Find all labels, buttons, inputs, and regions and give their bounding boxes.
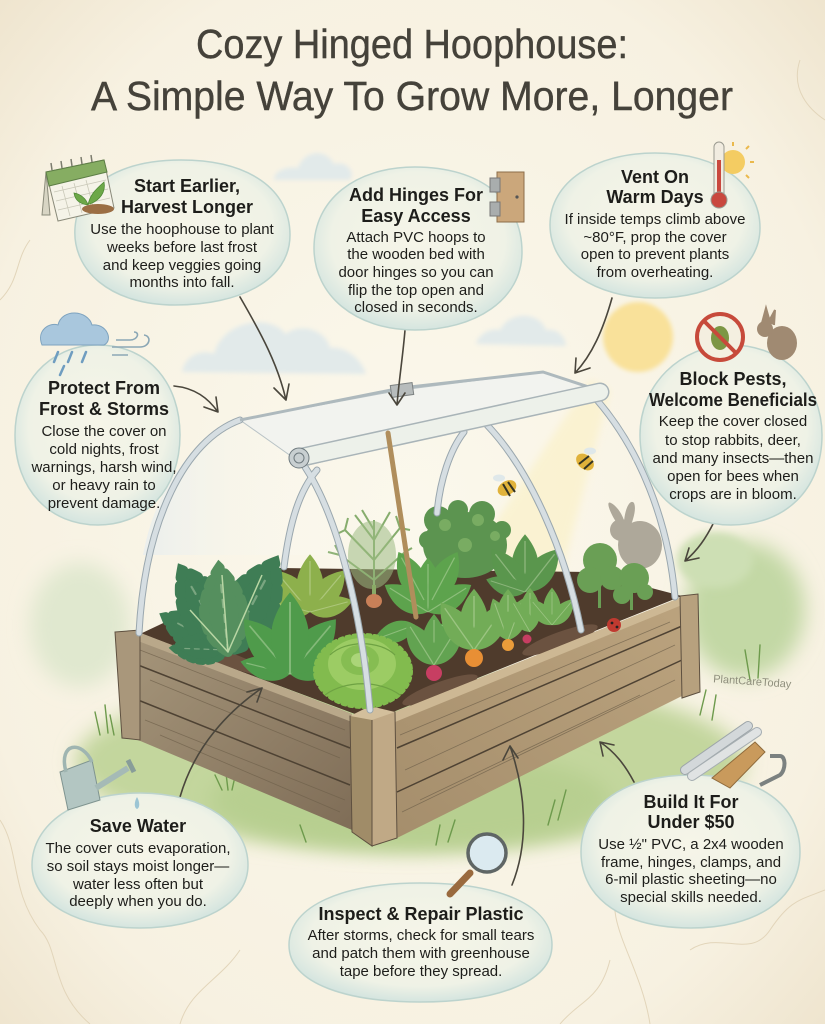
title: Cozy Hinged Hoophouse: bbox=[196, 21, 628, 67]
body text: tape before they spread. bbox=[340, 963, 502, 980]
body text: special skills needed. bbox=[620, 889, 762, 906]
left bed face bbox=[138, 632, 352, 830]
body text bbox=[653, 413, 813, 503]
heading bbox=[644, 792, 738, 832]
body text: from overheating. bbox=[597, 264, 713, 281]
heading bbox=[349, 185, 483, 226]
heading: Save Water bbox=[90, 816, 186, 836]
body text: door hinges so you can bbox=[338, 264, 494, 281]
heading: Easy Access bbox=[361, 206, 471, 226]
body text: crops are in bloom. bbox=[669, 486, 797, 503]
ladybug bbox=[607, 618, 621, 632]
spinach bbox=[231, 592, 349, 686]
heading: Welcome Beneficials bbox=[649, 390, 817, 410]
heading: Build It For bbox=[644, 792, 738, 812]
soil bbox=[140, 568, 682, 714]
panel: vent on warm days bbox=[550, 153, 760, 298]
heading: Vent On bbox=[621, 167, 689, 187]
body text: the wooden bed with bbox=[347, 246, 485, 263]
panel: start earlier bbox=[75, 160, 290, 305]
heading: Block Pests, bbox=[679, 369, 787, 389]
body text: prevent damage. bbox=[48, 495, 160, 512]
heading: Warm Days bbox=[606, 187, 704, 207]
body text: deeply when you do. bbox=[69, 893, 207, 910]
body text: and keep veggies going bbox=[103, 257, 261, 274]
body text: cold nights, frost bbox=[49, 441, 159, 458]
heading: Add Hinges For bbox=[349, 185, 483, 205]
kale bbox=[157, 552, 295, 665]
parsley bbox=[419, 500, 511, 578]
body text: and patch them with greenhouse bbox=[312, 945, 530, 962]
body text: to stop rabbits, deer, bbox=[665, 432, 801, 449]
body text: After storms, check for small tears bbox=[308, 927, 534, 944]
panel: block pests bbox=[640, 345, 822, 525]
cover roll bbox=[298, 392, 600, 458]
body text: Keep the cover closed bbox=[659, 413, 807, 430]
body text: or heavy rain to bbox=[52, 477, 156, 494]
arrow: save water bbox=[180, 688, 262, 797]
heading bbox=[121, 176, 253, 217]
bee bbox=[493, 474, 519, 499]
body text: and many insects—then bbox=[653, 450, 813, 467]
dill bbox=[328, 510, 412, 600]
body text: Use the hoophouse to plant bbox=[90, 221, 275, 238]
body text: If inside temps climb above bbox=[565, 211, 745, 228]
arrow: protect bbox=[174, 386, 218, 412]
icon: thermometer and sun bbox=[711, 142, 754, 208]
body text: closed in seconds. bbox=[354, 299, 478, 316]
body text: The cover cuts evaporation, bbox=[45, 840, 231, 857]
bee bbox=[573, 448, 597, 474]
panel: build for under 50 bbox=[581, 775, 800, 928]
body text bbox=[45, 840, 231, 910]
panel: add hinges bbox=[314, 167, 522, 330]
body text bbox=[598, 836, 784, 906]
body text: ~80°F, prop the cover bbox=[583, 229, 727, 246]
body text: months into fall. bbox=[129, 274, 235, 291]
body text bbox=[308, 927, 534, 980]
body text: 6-mil plastic sheeting—no bbox=[605, 871, 777, 888]
icon: calendar with seedling bbox=[42, 155, 114, 221]
beet root bbox=[366, 585, 382, 608]
top hinge bbox=[390, 383, 414, 397]
body text bbox=[338, 229, 494, 316]
heading: Protect From bbox=[48, 378, 160, 398]
body text: water less often but bbox=[72, 876, 204, 893]
heading: Under $50 bbox=[647, 812, 735, 832]
carrot bbox=[430, 589, 518, 667]
small carrot and radish bbox=[483, 588, 580, 651]
plants bbox=[157, 500, 653, 707]
heading: Harvest Longer bbox=[121, 197, 253, 217]
heading bbox=[649, 369, 817, 410]
body text: Close the cover on bbox=[41, 423, 167, 440]
body text bbox=[90, 221, 275, 291]
watermark: PlantCareToday bbox=[713, 673, 792, 691]
heading bbox=[606, 167, 704, 207]
body text bbox=[30, 423, 177, 512]
body text: so soil stays moist longer— bbox=[47, 858, 229, 875]
icon: rain cloud and wind bbox=[41, 313, 149, 375]
right bed face bbox=[395, 597, 682, 838]
body text: open for bees when bbox=[667, 468, 799, 485]
arrow: block pests bbox=[685, 522, 714, 561]
body text: open to prevent plants bbox=[581, 246, 729, 263]
body text: Attach PVC hoops to bbox=[346, 229, 486, 246]
icon: no bugs and rabbit bbox=[697, 308, 797, 360]
rabbit silhouette bbox=[608, 502, 662, 569]
grass and shrubs bbox=[30, 532, 805, 850]
right parsley bbox=[577, 543, 653, 610]
chard bbox=[482, 534, 568, 601]
icon: watering can bbox=[60, 747, 139, 810]
icon: door hinge bbox=[490, 172, 524, 222]
panel: save water bbox=[32, 793, 248, 928]
hoophouse frame and plastic bbox=[139, 372, 675, 710]
lettuce bbox=[315, 635, 411, 707]
panel: inspect and repair bbox=[289, 883, 552, 1002]
icon: magnifying glass bbox=[450, 834, 506, 894]
arrow: vent bbox=[575, 298, 612, 373]
arrow: start earlier bbox=[240, 297, 289, 400]
sun behind hoop bbox=[470, 302, 673, 580]
heading: Inspect & Repair Plastic bbox=[318, 904, 524, 924]
body text: warnings, harsh wind, bbox=[30, 459, 177, 476]
arrow: build bbox=[600, 742, 634, 782]
panel: protect from frost bbox=[15, 345, 180, 525]
title: A Simple Way To Grow More, Longer bbox=[91, 73, 733, 119]
icon: pvc pipes, wood and clamp bbox=[685, 726, 784, 788]
clouds bbox=[182, 153, 566, 374]
basil bbox=[370, 546, 482, 650]
light spinach bbox=[265, 554, 355, 622]
body text: frame, hinges, clamps, and bbox=[601, 854, 781, 871]
wooden prop stick bbox=[388, 433, 416, 617]
arrow: hinges bbox=[389, 330, 405, 405]
body text bbox=[565, 211, 745, 281]
heading: Frost & Storms bbox=[39, 399, 169, 419]
title bbox=[91, 21, 733, 119]
body text: weeks before last frost bbox=[106, 239, 258, 256]
body text: Use ½" PVC, a 2x4 wooden bbox=[598, 836, 784, 853]
arrow: inspect bbox=[503, 746, 524, 885]
heading bbox=[39, 378, 169, 419]
radish bbox=[397, 614, 471, 681]
heading: Start Earlier, bbox=[134, 176, 240, 196]
raised garden bed bbox=[115, 568, 700, 846]
body text: flip the top open and bbox=[348, 282, 484, 299]
